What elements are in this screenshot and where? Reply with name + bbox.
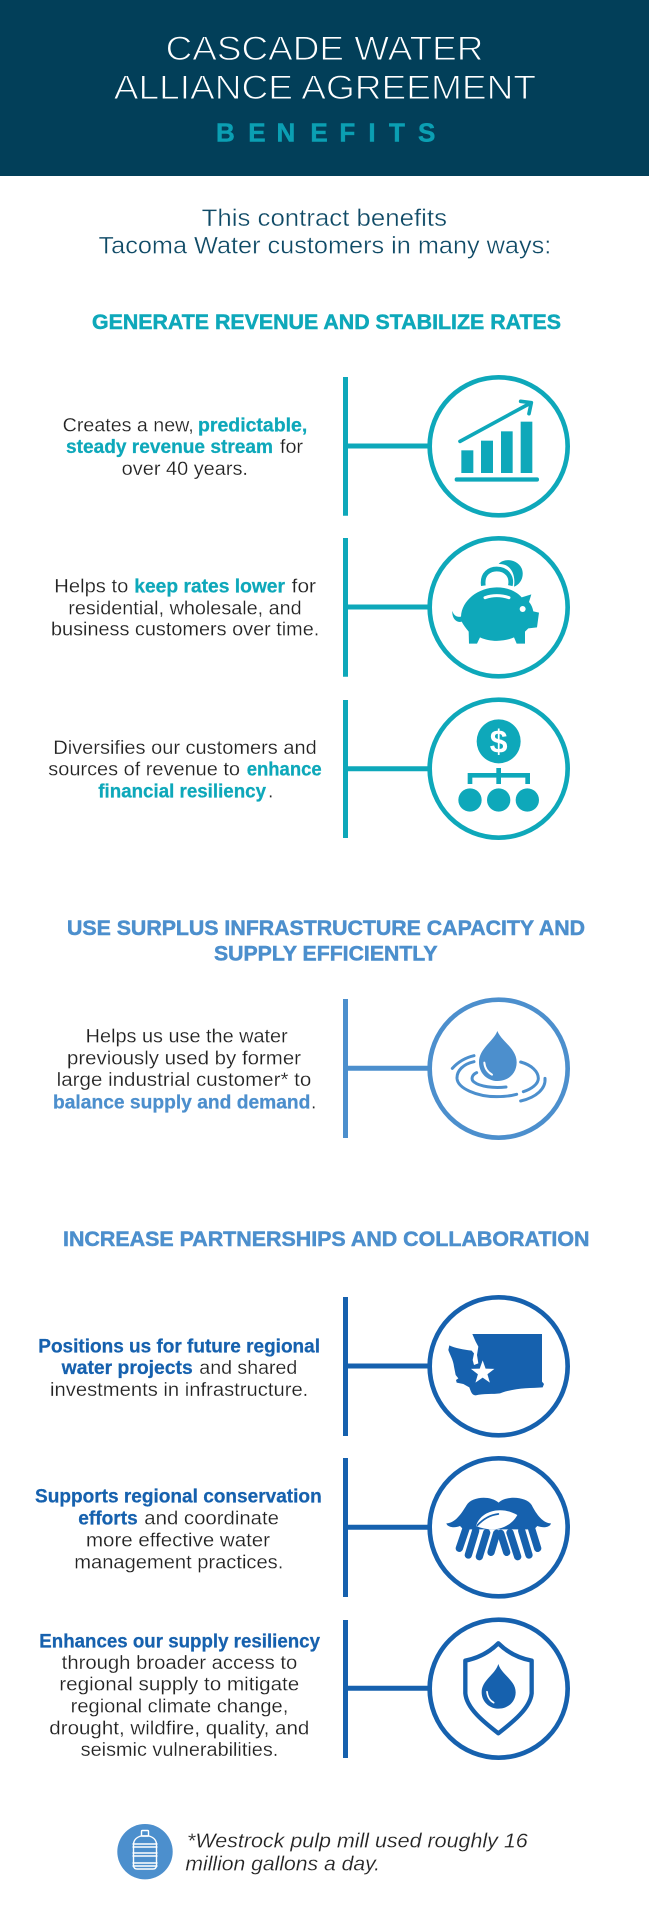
footnote — [117, 1824, 528, 1879]
icon circle: piggy bank — [430, 538, 568, 676]
panel: balance supply — [53, 999, 568, 1138]
text: financial resiliency: financial resiliency — [98, 781, 266, 802]
text: balance supply: previously used by former — [67, 1048, 302, 1069]
text: conservation: efforts — [78, 1508, 138, 1529]
text: regional projects — [38, 1336, 320, 1401]
text: supply resiliency: drought, wildfire, quality, and — [49, 1718, 309, 1739]
text: lower rates: business customers over time. — [51, 620, 319, 641]
text: balance supply — [53, 1027, 316, 1113]
intro text — [98, 205, 551, 259]
text: lower rates: for — [292, 576, 317, 597]
text: financial resiliency — [48, 738, 322, 802]
intro text: Tacoma Water customers in many ways: — [98, 232, 551, 259]
heading: generate revenue: GENERATE REVENUE AND STABILIZE RATES — [92, 311, 561, 334]
connector — [346, 700, 428, 838]
header banner — [0, 0, 649, 176]
icon circle: water drop ripple — [430, 1000, 568, 1138]
icon circle: dollar tree: $ — [490, 724, 508, 760]
footnote text: million gallons a day. — [185, 1853, 380, 1876]
text: revenue stream — [63, 416, 307, 480]
text: financial resiliency: . — [268, 781, 273, 802]
icon circle: Washington state — [430, 1297, 568, 1435]
text: supply resiliency: through broader access to — [62, 1653, 297, 1674]
title — [114, 30, 536, 107]
connector — [346, 377, 428, 516]
text: balance supply: . — [311, 1092, 316, 1113]
connector — [346, 1297, 428, 1436]
text: revenue stream: Creates a new, — [63, 416, 194, 437]
text: financial resiliency: sources of revenue to — [48, 760, 240, 781]
footnote text — [185, 1829, 528, 1876]
heading: use surplus infrastructure: SUPPLY EFFICIENTLY — [214, 943, 438, 966]
subtitle: benefits: BENEFITS — [216, 118, 435, 148]
icon: water bottle — [117, 1824, 173, 1879]
intro text: This contract benefits — [202, 205, 447, 232]
text: supply resiliency: Enhances our supply resiliency — [39, 1632, 320, 1653]
text: regional projects: Positions us for future regional — [38, 1336, 320, 1357]
heading: use surplus infrastructure: USE SURPLUS INFRASTRUCTURE CAPACITY AND — [67, 917, 585, 940]
text: supply resiliency: regional climate change, — [71, 1697, 288, 1718]
icon circle: dollar tree — [430, 700, 568, 838]
text: regional projects: and shared — [199, 1358, 297, 1379]
footnote text: *Westrock pulp mill used roughly 16 — [187, 1829, 528, 1852]
panel: financial resiliency — [48, 700, 568, 838]
text: conservation: more effective water — [86, 1530, 271, 1551]
text: supply resiliency — [39, 1632, 320, 1761]
panel: lower rates — [51, 538, 568, 677]
panel: regional projects — [38, 1297, 568, 1436]
icon circle: shield with drop — [430, 1620, 568, 1758]
icon circle: growth chart — [430, 377, 568, 515]
heading: use surplus infrastructure — [67, 917, 585, 966]
text: lower rates: residential, wholesale, and — [68, 598, 302, 619]
connector — [346, 1458, 428, 1597]
text: regional projects: water projects — [61, 1358, 193, 1379]
text: balance supply: Helps us use the water — [86, 1027, 288, 1048]
title: CASCADE WATER — [166, 30, 483, 68]
text: lower rates: Helps to — [54, 576, 128, 597]
connector — [346, 1620, 428, 1758]
connector — [346, 999, 428, 1138]
panel: supply resiliency — [39, 1620, 568, 1761]
text: conservation: and coordinate — [144, 1508, 279, 1529]
text: financial resiliency: Diversifies our customers and — [53, 738, 317, 759]
icon circle: hands and leaf — [430, 1458, 568, 1596]
panel: conservation — [35, 1458, 568, 1597]
text: regional projects: investments in infrastructure. — [50, 1380, 308, 1401]
title: ALLIANCE AGREEMENT — [114, 69, 536, 107]
text: revenue stream: steady revenue stream — [66, 437, 273, 458]
text: conservation — [35, 1486, 322, 1573]
text: revenue stream: for — [280, 437, 304, 458]
text: supply resiliency: seismic vulnerabilities. — [81, 1740, 278, 1761]
text: conservation: Supports regional conservation — [35, 1486, 322, 1507]
text: lower rates — [51, 576, 319, 641]
text: supply resiliency: regional supply to mitigate — [59, 1675, 299, 1696]
text: revenue stream: over 40 years. — [122, 459, 248, 480]
text: conservation: management practices. — [74, 1552, 283, 1573]
text: balance supply: balance supply and demand — [53, 1092, 310, 1113]
connector — [346, 538, 428, 677]
text: revenue stream: predictable, — [198, 416, 307, 437]
panel: revenue stream — [63, 377, 568, 516]
text: financial resiliency: enhance — [247, 760, 322, 781]
text: balance supply: large industrial customer* to — [57, 1070, 311, 1091]
text: lower rates: keep rates lower — [134, 576, 286, 597]
heading: increase partnerships: INCREASE PARTNERSHIPS AND COLLABORATION — [63, 1228, 590, 1251]
